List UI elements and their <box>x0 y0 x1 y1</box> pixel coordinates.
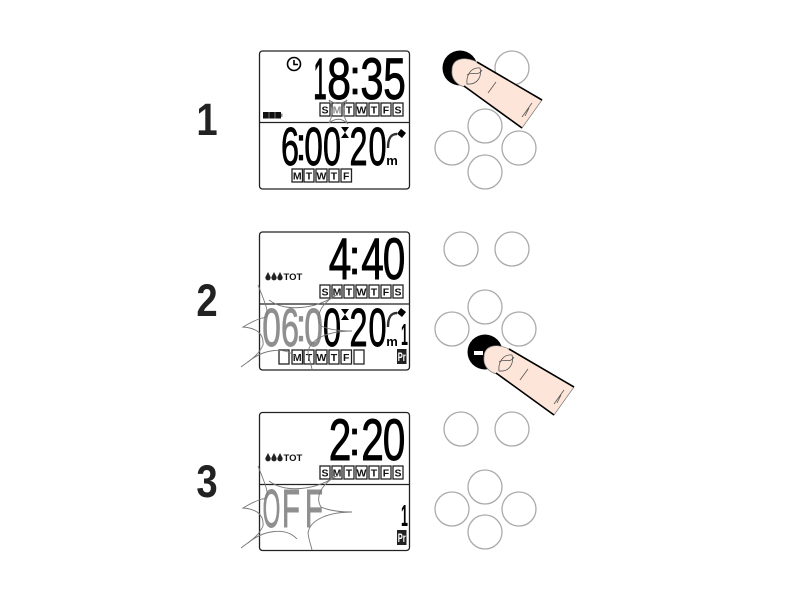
weekday row: S <box>321 468 329 480</box>
current time 18:35 <box>313 46 406 112</box>
icon: finger pressing <box>484 346 574 415</box>
blinking program time 06:00 20m: 0 <box>323 299 341 358</box>
program number 1: 1 <box>401 319 408 353</box>
weekday row: S <box>394 286 402 298</box>
program weekday row: W <box>317 352 327 364</box>
weekday row: T <box>371 468 378 480</box>
panel: LCD display step 1 <box>260 46 410 189</box>
program time 6:00 20m: : <box>296 119 306 170</box>
blinking program time 06:00 20m: 0 <box>368 299 387 358</box>
current time 4:40: : <box>348 229 361 285</box>
weekday row: T <box>346 468 353 480</box>
current time 2:20 <box>329 408 405 473</box>
panel: LCD display step 3 <box>241 408 410 550</box>
current time 18:35: 8 <box>327 47 351 112</box>
weekday row: W <box>357 104 367 116</box>
current time 2:20: 0 <box>383 408 405 473</box>
icon: water drops <box>265 453 283 461</box>
blinking OFF text: F <box>305 480 323 539</box>
icon: clock <box>288 58 300 70</box>
program weekday row <box>279 350 364 364</box>
blink burst on M <box>329 100 348 124</box>
weekday row: M <box>333 104 342 116</box>
weekday row: T <box>371 104 378 116</box>
program weekday row: T <box>306 170 313 182</box>
step number 1: 1 <box>196 94 218 145</box>
icon: hourglass <box>341 127 349 138</box>
program weekday row: T <box>331 352 338 364</box>
program weekday row: M <box>293 170 302 182</box>
icon: tap <box>388 129 406 148</box>
keypad step 2 <box>435 232 574 415</box>
current time 4:40: 0 <box>383 227 405 292</box>
program weekday row: F <box>343 170 350 182</box>
current time 4:40 <box>329 227 405 292</box>
program weekday row: M <box>293 352 302 364</box>
program weekday row <box>292 169 352 182</box>
weekday row: S <box>394 104 402 116</box>
weekday row <box>320 285 403 298</box>
program weekday row: T <box>331 170 338 182</box>
blinking OFF text <box>263 479 323 539</box>
icon: hourglass <box>341 309 349 320</box>
current time 2:20: 2 <box>329 408 351 473</box>
weekday row: S <box>321 286 329 298</box>
pressed button <box>442 50 478 86</box>
program time 6:00 20m: 2 <box>349 118 368 177</box>
blink burst <box>241 285 352 369</box>
current time 18:35: 3 <box>360 46 384 112</box>
icon: battery <box>263 112 282 118</box>
weekday row: M <box>333 468 342 480</box>
program time 6:00 20m: 0 <box>304 116 323 177</box>
program badge Pr: Pr <box>398 350 406 364</box>
icon: tap <box>388 308 406 327</box>
program badge Pr <box>397 349 406 364</box>
current time 18:35: 5 <box>383 47 406 112</box>
current time 4:40: 4 <box>329 227 351 292</box>
TOT label: TOT <box>284 453 303 464</box>
blink burst <box>241 466 352 550</box>
weekday row: T <box>346 104 353 116</box>
blinking program time 06:00 20m <box>262 297 398 358</box>
step number 3: 3 <box>196 456 218 507</box>
program time 6:00 20m: 0 <box>368 118 387 177</box>
weekday row: W <box>357 286 367 298</box>
weekday row: S <box>394 468 402 480</box>
pressed minus button <box>468 334 502 370</box>
icon: finger pressing <box>452 59 542 128</box>
blinking program time 06:00 20m: : <box>296 300 306 351</box>
weekday row: T <box>346 286 353 298</box>
weekday row: S <box>321 104 329 116</box>
weekday row: F <box>383 286 390 298</box>
step number 2: 2 <box>196 275 218 326</box>
current time 2:20: : <box>348 410 361 466</box>
keypad step 3 <box>435 412 536 549</box>
program time 6:00 20m: m <box>386 153 398 168</box>
current time 18:35: : <box>349 49 361 105</box>
weekday row: W <box>357 468 367 480</box>
program weekday row: T <box>306 352 313 364</box>
blinking program time 06:00 20m: 2 <box>349 299 368 358</box>
program weekday row: F <box>343 352 350 364</box>
program weekday row: W <box>317 170 327 182</box>
weekday row: T <box>371 286 378 298</box>
blinking program time 06:00 20m: 0 <box>262 297 281 358</box>
blinking program time 06:00 20m: 6 <box>281 299 299 358</box>
current time 18:35: 1 <box>313 48 327 112</box>
program badge Pr <box>397 530 406 545</box>
TOT label: TOT <box>284 272 303 283</box>
weekday row: M <box>333 286 342 298</box>
program time 6:00 20m: 0 <box>323 118 341 177</box>
blinking OFF text: F <box>282 480 300 539</box>
weekday row <box>320 466 403 480</box>
panel: LCD display step 2 <box>241 227 410 370</box>
keypad step 1 <box>435 50 542 189</box>
weekday row: F <box>383 104 390 116</box>
program number 1: 1 <box>401 500 408 534</box>
icon: water drops <box>265 272 283 280</box>
weekday row <box>320 103 403 116</box>
weekday row: F <box>383 468 390 480</box>
program time 6:00 20m <box>281 116 398 177</box>
blinking program time 06:00 20m: 0 <box>304 297 323 358</box>
blinking OFF text: O <box>263 479 280 539</box>
blinking program time 06:00 20m: m <box>386 334 398 349</box>
current time 4:40: 4 <box>361 227 384 292</box>
program badge Pr: Pr <box>398 531 406 545</box>
program time 6:00 20m: 6 <box>281 118 299 177</box>
current time 2:20: 2 <box>361 408 384 473</box>
